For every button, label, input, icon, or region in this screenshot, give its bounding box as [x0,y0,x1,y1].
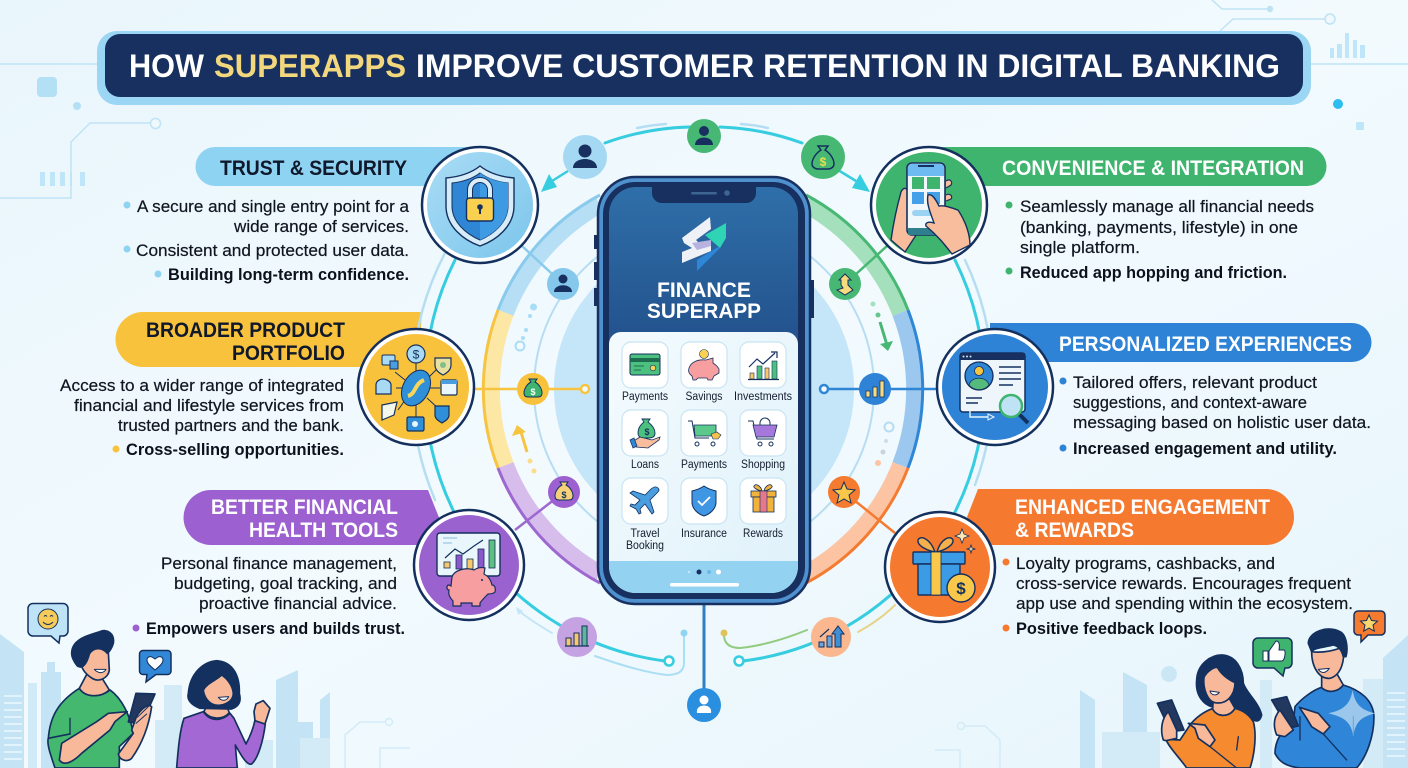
title banner: HOW [129,48,205,84]
text block: personalized experiences: Increased engagement and utility. [1073,439,1337,458]
node: growth chart lower right [811,617,851,657]
text block: better financial health tools: proactive financial advice. [199,594,397,613]
icon circle: rewards gift: $ [956,579,966,598]
node: user top centre [687,119,721,153]
node: money bag purple: $ [561,490,567,500]
app: insurance: Insurance [681,528,727,540]
text block: better financial health tools [132,554,405,638]
text block: convenience and integration: Seamlessly manage all financial needs [1020,197,1314,216]
text block: convenience and integration: (banking, payments, lifestyle) in one [1020,218,1298,237]
background city skyline left [0,634,330,768]
speech bubble: heart [140,650,171,682]
heading: convenience and integration: CONVENIENCE & INTEGRATION [1002,156,1304,180]
app: investments chart: Investments [734,391,792,403]
app name [647,279,761,323]
arrow: to trust circle [541,171,568,192]
text block: convenience and integration [1006,197,1314,282]
text block: trust and security [124,197,410,284]
app: loans: $ [644,427,650,437]
node: exchange arrows right [829,268,861,300]
heading: better financial health tools [211,495,398,542]
heading: better financial health tools: BETTER FINANCIAL [211,495,398,519]
app: payments cart: Payments [681,459,727,471]
person: man in blue sweater [1272,629,1375,768]
outer teal and pale orbit arcs [412,124,993,675]
text block: enhanced engagement and rewards [1002,554,1353,638]
text block: broader product portfolio: financial and lifestyle services from [74,396,344,415]
text block: personalized experiences: Tailored offers, relevant product [1073,373,1317,392]
node: user top left [563,135,607,179]
arrow: yellow upward [512,425,527,452]
node: star orange [828,476,860,508]
app: savings piggy: Savings [686,391,723,403]
app: rewards: Rewards [743,528,783,540]
node: money top right [801,135,845,179]
node: money bag yellow: $ [530,387,536,397]
bottom circuit traces [345,718,1000,768]
person: woman in orange sweater [1157,655,1262,768]
app: loans: Loans [631,459,659,471]
heading: better financial health tools: HEALTH TOOLS [249,518,398,542]
heading: enhanced engagement and rewards [1015,495,1270,542]
icon circle: rewards gift [885,512,995,622]
app name: SUPERAPP [647,300,761,323]
person: woman in purple sweater [177,661,270,768]
segmented colour ring [483,195,923,583]
text block: enhanced engagement and rewards: app use and spending within the ecosystem. [1016,594,1353,613]
icon circle: personalised profile [937,329,1053,445]
text block: broader product portfolio: trusted partners and the bank. [118,416,344,435]
text block: trust and security: wide range of services. [233,217,409,236]
text block: personalized experiences [1060,373,1371,458]
app: shopping cart [740,410,786,471]
speech bubble: thumbs up [1253,638,1292,676]
heading: broader product portfolio [146,318,345,365]
phone [596,177,812,604]
icon circle: broader portfolio network: $ [413,348,420,362]
text block: broader product portfolio: Access to a wider range of integrated [60,376,344,395]
arrow: green downward [880,322,893,351]
app: payments card [622,342,668,403]
text block: enhanced engagement and rewards: Loyalty programs, cashbacks, and [1016,554,1275,573]
app: rewards [740,478,786,540]
heading: broader product portfolio: PORTFOLIO [232,341,345,365]
text block: personalized experiences: messaging based on holistic user data. [1073,413,1371,432]
title banner: IMPROVE CUSTOMER RETENTION IN DIGITAL BANKING [416,48,1280,84]
central pale disc [554,239,854,539]
arrow: to convenience circle [838,170,870,192]
logo [682,217,726,271]
node: bar chart blue [859,373,891,405]
title banner: SUPERAPPS [214,48,406,84]
heading: broader product portfolio: BROADER PRODUCT [146,318,345,342]
text block: enhanced engagement and rewards: Positive feedback loops. [1016,619,1207,638]
app: insurance [681,478,727,540]
heading: enhanced engagement and rewards: & REWARDS [1015,518,1134,542]
node: money top right: $ [820,155,827,169]
text block: personalized experiences: suggestions, and context-aware [1073,393,1307,412]
text block: broader product portfolio: Cross-selling opportunities. [126,440,344,459]
node: user bottom [687,688,721,722]
app: loans [622,410,668,471]
icon circle: trust shield [422,147,538,263]
node: user left [547,268,579,300]
background city skyline right [1080,635,1408,768]
app: travel booking: Booking [626,540,664,552]
app: shopping cart: Shopping [741,459,785,471]
heading: personalized experiences: PERSONALIZED EXPERIENCES [1059,332,1352,356]
person: man in green shirt with phone [48,631,155,768]
heading: trust and security: TRUST & SECURITY [220,156,407,180]
icon circle: financial health [414,510,524,620]
background circuit decoration left [0,64,160,198]
text block: trust and security: Building long-term confidence. [168,265,409,284]
icon circle: broader portfolio network [358,329,474,445]
app: travel booking: Travel [630,528,660,540]
text block: better financial health tools: budgeting, goal tracking, and [174,574,397,593]
node: money bag purple [548,476,580,508]
text block: convenience and integration: Reduced app hopping and friction. [1020,263,1287,282]
app: savings piggy [681,342,727,403]
app: payments card: Payments [622,391,668,403]
text block: trust and security: A secure and single entry point for a [137,197,410,216]
title banner [97,31,1311,105]
app: investments chart [734,342,792,403]
text block: convenience and integration: single platform. [1020,238,1140,257]
speech bubble: smile [28,604,68,643]
background circuit decoration right [1212,0,1408,130]
node: money bag yellow [517,373,549,405]
app: payments cart [681,410,727,471]
app grid panel [609,332,798,593]
orbit end markers and dots [516,302,894,666]
text block: better financial health tools: Empowers users and builds trust. [146,619,405,638]
app: travel booking [622,478,668,552]
connector lines [474,246,937,690]
text block: trust and security: Consistent and protected user data. [136,241,409,260]
text block: broader product portfolio [60,376,344,459]
heading: enhanced engagement and rewards: ENHANCED ENGAGEMENT [1015,495,1270,519]
icon circle: convenience hand and phone [871,147,987,263]
app name: FINANCE [657,279,751,302]
category pills behind circles [115,147,1371,545]
speech bubble: star [1354,611,1385,642]
inner thin ring [534,219,874,559]
node: bar chart lower left [557,617,597,657]
text block: better financial health tools: Personal finance management, [161,554,397,573]
text block: enhanced engagement and rewards: cross-service rewards. Encourages frequent [1016,574,1351,593]
